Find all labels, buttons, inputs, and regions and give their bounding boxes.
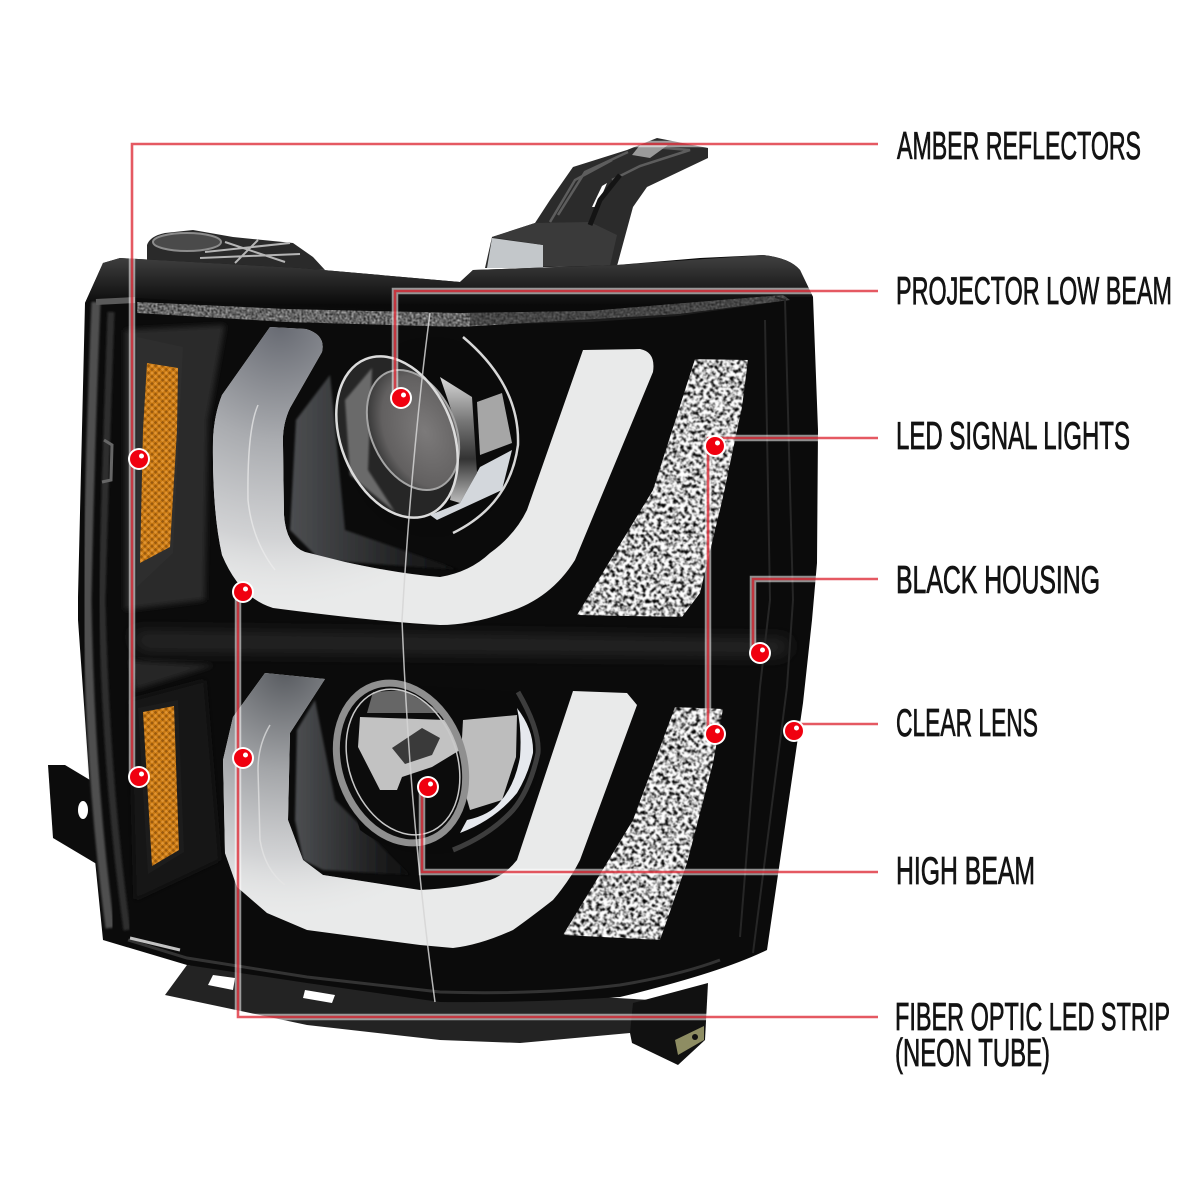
left mounting tab: [48, 765, 100, 866]
label: clear lens: CLEAR LENS: [896, 702, 1038, 745]
dot: projector: [390, 387, 412, 409]
leader halos: [132, 144, 878, 1017]
dot: amber lower: [128, 766, 150, 788]
marker dots: [128, 387, 805, 798]
top-left mounting clip: [147, 230, 325, 270]
top housing band: [85, 255, 813, 312]
dot: fiber lower: [232, 747, 254, 769]
upper amber reflector: [137, 337, 183, 587]
left inner panel shading: [125, 325, 225, 610]
dot: fiber upper: [232, 581, 254, 603]
right housing rim lines: [740, 297, 793, 953]
label: high beam: HIGH BEAM: [896, 850, 1035, 893]
dot: LED lower: [704, 723, 726, 745]
labels: [895, 125, 1172, 1075]
lens seam: [402, 313, 435, 1002]
black housing body: [78, 255, 818, 1002]
top-right mounting bracket: [485, 138, 708, 268]
lower high-beam assembly: [315, 665, 538, 861]
lower amber reflector: [138, 700, 184, 874]
lower fiber optic tube: [223, 673, 637, 948]
lower LED signal lights: [563, 707, 723, 940]
left housing rim: [87, 300, 135, 930]
upper projector lens assembly: [314, 337, 520, 537]
dot: high beam: [417, 776, 439, 798]
dot: LED upper: [704, 435, 726, 457]
lower mounting tray: [165, 965, 708, 1065]
label: neon tube: (NEON TUBE): [895, 1032, 1050, 1075]
upper projector recess: [290, 375, 460, 570]
bottom lens edge: [128, 940, 720, 993]
dot: amber upper: [128, 448, 150, 470]
textured lens strip: [137, 295, 790, 327]
leader core lines: [132, 144, 878, 1017]
callout leader lines: [132, 144, 878, 1017]
lower projector recess: [295, 700, 410, 875]
upper LED signal lights: [577, 359, 748, 617]
dot: black housing: [749, 642, 771, 664]
upper fiber optic tube: [213, 327, 653, 625]
mid-band soft shading: [130, 632, 790, 655]
dot: clear lens: [783, 720, 805, 742]
headlight photo illustration: [48, 138, 818, 1065]
